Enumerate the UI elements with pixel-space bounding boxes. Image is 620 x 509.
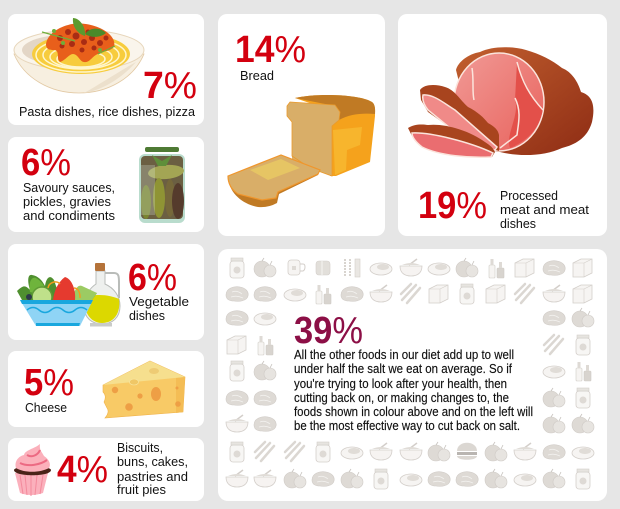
- caption: dishes: [500, 216, 536, 231]
- icon: salad bowl and oil bottle: [17, 263, 120, 326]
- icon: sliced ham: [408, 47, 593, 157]
- icon: bowl of spaghetti bolognese: [14, 18, 144, 93]
- panel: bread: [218, 14, 385, 236]
- caption: Vegetable: [129, 294, 189, 309]
- panel: other foods 39%: [218, 249, 607, 501]
- percentage 7%: 7%: [143, 65, 197, 107]
- body text: you're trying to look after your health, then: [294, 376, 507, 391]
- caption: [23, 180, 116, 223]
- icon: cupcake: [14, 444, 51, 496]
- body text: under half the salt we eat on average. So if: [294, 361, 512, 376]
- body text: be the most effective way to cut back on salt.: [294, 418, 520, 433]
- body text: cutting back on, or making changes to, the: [294, 390, 509, 405]
- icon grid: grey food icons: [226, 258, 594, 489]
- body text: foods shown in colour above and on the left will: [294, 404, 533, 419]
- percentage 14%: 14%: [235, 29, 306, 71]
- caption: Cheese: [25, 400, 67, 415]
- caption: pickles, gravies: [23, 194, 111, 209]
- caption: pastries and: [117, 469, 188, 484]
- caption: fruit pies: [117, 482, 166, 497]
- caption: Pasta dishes, rice dishes, pizza: [19, 104, 196, 119]
- percentage 6%: 6%: [128, 257, 177, 299]
- percentage 6%: 6%: [21, 142, 71, 184]
- percentage 5%: 5%: [24, 362, 74, 404]
- percentage 39%: 39%: [294, 310, 363, 352]
- caption: and condiments: [23, 208, 116, 223]
- panel: vegetable dishes: [8, 244, 204, 340]
- icon: sliced loaf: [228, 95, 375, 207]
- caption: Processed: [500, 188, 558, 203]
- caption: dishes: [129, 308, 165, 323]
- body text: [294, 347, 533, 433]
- percentage 19%: 19%: [418, 185, 487, 227]
- body text: All the other foods in our diet add up to well: [294, 347, 514, 362]
- caption: meat and meat: [500, 202, 589, 217]
- icon: pickle jar: [139, 147, 185, 223]
- caption: Savoury sauces,: [23, 180, 115, 195]
- caption: [500, 188, 589, 231]
- caption: Bread: [240, 68, 274, 83]
- panel: biscuits and cakes: [8, 438, 204, 501]
- percentage 4%: 4%: [57, 449, 108, 491]
- caption: buns, cakes,: [117, 454, 188, 469]
- panel: savoury sauces: [8, 137, 204, 232]
- caption: [117, 440, 188, 497]
- caption: [129, 294, 189, 323]
- panel: cheese: [8, 351, 204, 427]
- panel: pasta dishes: [8, 14, 204, 125]
- caption: Biscuits,: [117, 440, 163, 455]
- icon: cheese wedge: [103, 361, 185, 418]
- panel: processed meat: [398, 14, 607, 236]
